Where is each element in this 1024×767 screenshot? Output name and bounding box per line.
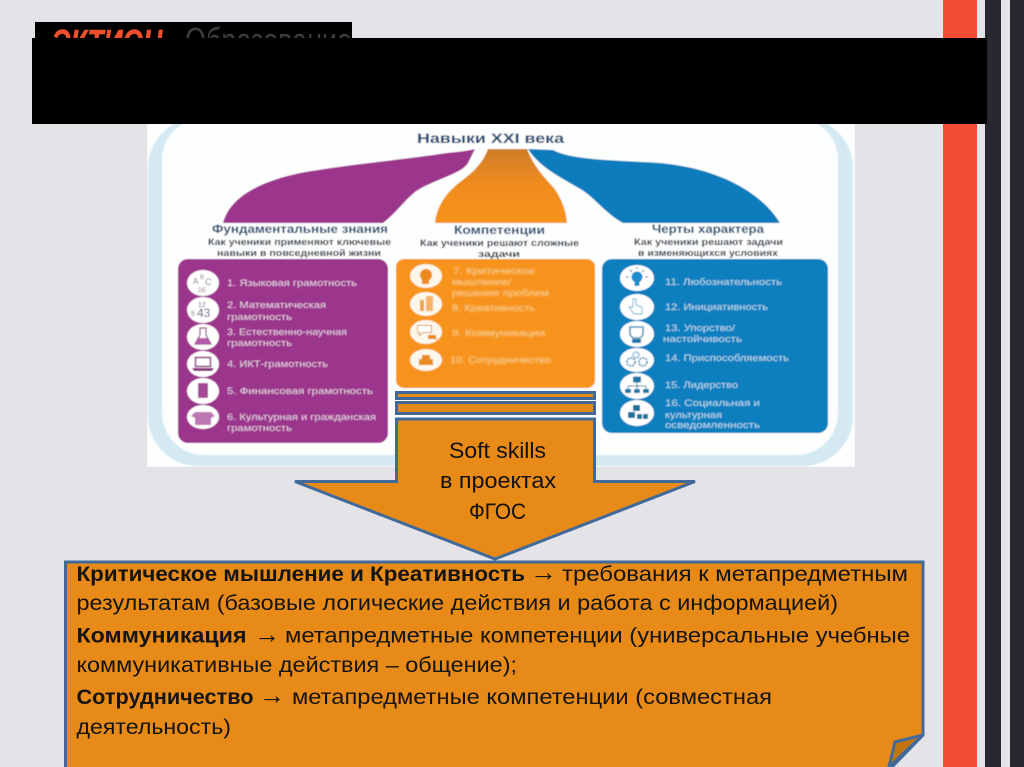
- note text: →: [530, 557, 557, 587]
- note text: →: [254, 619, 280, 649]
- list: trait items: 13. Упорство/: [665, 323, 735, 334]
- list: literacy items: 6. Культурная и гражданская: [227, 412, 376, 423]
- column heading: character traits: Как ученики решают задачи: [634, 237, 783, 248]
- note text: [76, 557, 910, 739]
- column heading: fundamental knowledge: Фундаментальные знания: [212, 224, 388, 236]
- block arrow: Soft skills: [295, 419, 695, 559]
- column heading: competencies: задачи: [478, 249, 520, 260]
- icons: literacy set: 12: [198, 302, 206, 309]
- icons: literacy set: B: [200, 275, 204, 281]
- list: trait items: настойчивость: [663, 334, 742, 345]
- list: competency items: решение проблем: [452, 288, 549, 298]
- arrow tail stripe: thin: [396, 392, 594, 398]
- panel: character traits: [602, 259, 828, 433]
- column heading: competencies: Компетенции: [454, 225, 545, 237]
- list: trait items: [663, 277, 789, 431]
- note text: результатам (базовые логические действия и работа с информацией): [76, 592, 838, 615]
- blue swoosh: [528, 149, 780, 223]
- arrow tail stripe: thicker: [396, 402, 594, 414]
- note text: Критическое мышление и Креативность: [76, 563, 525, 586]
- cropped logo band: Образование: [185, 20, 352, 61]
- list: trait items: 16. Социальная и: [665, 398, 760, 409]
- list: competency items: 9. Коммуникации: [452, 328, 545, 338]
- orange swoosh: [435, 149, 567, 223]
- cropped logo band: «ЭКТИОН»: [37, 22, 177, 63]
- icons: literacy set: C: [205, 277, 212, 287]
- picture: 21st century skills diagram: [147, 118, 855, 467]
- list: competency items: [450, 266, 551, 365]
- list: competency items: 10. Сотрудничество: [450, 355, 551, 365]
- icons: literacy set: [187, 270, 219, 429]
- icons: literacy set: DE: [198, 288, 206, 294]
- right side stripes: [943, 0, 1024, 767]
- panel: fundamental knowledge: [178, 259, 388, 443]
- arrow label: Soft skills: [449, 438, 546, 463]
- list: trait items: 11. Любознательность: [665, 277, 782, 288]
- list: literacy items: грамотность: [227, 338, 292, 349]
- icons: literacy set: 43: [197, 306, 211, 320]
- arrow label: ФГОС: [469, 499, 526, 524]
- purple swoosh: [223, 149, 475, 223]
- icons: traits set: [620, 265, 654, 426]
- note text: требования к метапредметным: [562, 563, 908, 586]
- list: competency items: мышление/: [452, 277, 512, 287]
- icons: literacy set: 5: [191, 311, 195, 318]
- panel: competencies: [396, 259, 595, 388]
- note text: метапредметные компетенции (совместная: [292, 686, 772, 709]
- list: trait items: осведомленность: [665, 420, 760, 431]
- folded corner: [889, 735, 923, 767]
- column heading: character traits: [634, 224, 783, 259]
- note text: Коммуникация: [76, 624, 247, 648]
- list: literacy items: 3. Естественно-научная: [227, 327, 347, 338]
- column heading: character traits: Черты характера: [652, 224, 765, 236]
- list: literacy items: грамотность: [227, 312, 292, 323]
- list: competency items: 7. Критическое: [453, 266, 535, 276]
- icons: competencies set: [410, 264, 442, 371]
- arrow label: в проектах: [440, 468, 556, 493]
- note text: метапредметные компетенции (универсальные учебные: [285, 624, 910, 648]
- list: trait items: 12. Инициативность: [665, 302, 768, 313]
- column heading: competencies: Как ученики решают сложные: [420, 238, 579, 249]
- list: trait items: 14. Приспособляемость: [665, 353, 789, 364]
- list: literacy items: 2. Математическая: [227, 300, 326, 311]
- column heading: competencies: [420, 225, 579, 260]
- title bar: blacked out: [32, 38, 987, 124]
- column heading: fundamental knowledge: навыки в повседневной жизни: [217, 248, 381, 259]
- list: competency items: 8. Креативность: [452, 303, 535, 313]
- cropped logo band: [35, 22, 352, 38]
- list: trait items: культурная: [665, 410, 722, 421]
- column heading: character traits: в изменяющихся условиях: [638, 248, 779, 259]
- list: literacy items: [227, 278, 376, 434]
- column heading: fundamental knowledge: Как ученики применяют ключевые: [208, 237, 391, 248]
- arrow label: [440, 438, 556, 524]
- note text: деятельность): [76, 716, 231, 739]
- list: literacy items: 1. Языковая грамотность: [227, 278, 357, 289]
- note text: →: [259, 680, 285, 710]
- note box: soft skills in standards: [66, 557, 923, 767]
- note text: коммуникативные действия – общение);: [76, 654, 517, 677]
- list: literacy items: 5. Финансовая грамотность: [227, 386, 373, 397]
- list: trait items: 15. Лидерство: [665, 380, 738, 391]
- list: literacy items: грамотность: [227, 423, 292, 434]
- column heading: fundamental knowledge: [208, 224, 391, 259]
- list: literacy items: 4. ИКТ-грамотность: [227, 359, 328, 370]
- diagram title: Навыки XXI века: [417, 130, 564, 146]
- icons: literacy set: A: [193, 277, 199, 286]
- note text: Сотрудничество: [76, 686, 254, 709]
